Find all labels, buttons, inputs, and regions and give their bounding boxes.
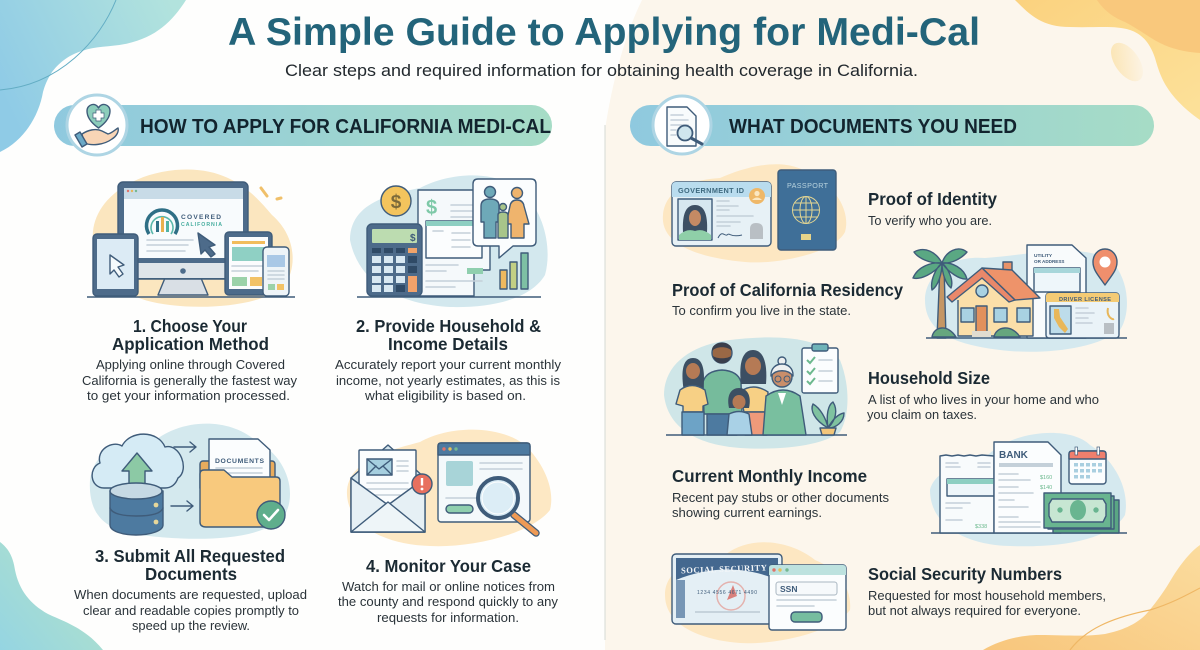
illustration: family with checklist <box>664 337 848 449</box>
step 4 text <box>338 579 558 625</box>
illustration: devices with Covered California site: CALIFORNIA <box>181 222 222 228</box>
illustration: house, palm tree, utility bill and license <box>913 245 1127 352</box>
illustration: envelope and case portal with magnifier <box>347 430 551 546</box>
document: proof of identity <box>663 164 997 262</box>
step 4 text: the county and respond quickly to any <box>338 594 558 609</box>
illustration: pay stub, bank statement, calendar and cash <box>930 433 1127 546</box>
illustration: social security card and SSN form <box>665 542 850 643</box>
text: social security numbers: but not always required for everyone. <box>868 603 1081 618</box>
step 2 text <box>335 357 562 403</box>
illustration: social security card and SSN form: SSN <box>780 584 797 594</box>
step 3 text: speed up the review. <box>132 618 250 633</box>
step 2 heading <box>356 316 541 354</box>
illustration: house, palm tree, utility bill and license: DRIVER LICENSE <box>1059 297 1111 303</box>
illustration: government ID and passport: PASSPORT <box>787 181 829 190</box>
step 1 <box>82 169 297 403</box>
step 1 heading: 1. Choose Your <box>133 316 247 336</box>
panel header: how to apply <box>54 95 552 155</box>
illustration: cloud upload to documents folder: DOCUMENTS <box>215 458 264 465</box>
panel: how to apply <box>54 95 562 633</box>
text: current monthly income <box>672 490 890 520</box>
illustration: cloud upload to documents folder <box>90 424 290 539</box>
illustration: social security card and SSN form: SOCIAL SECURITY <box>681 562 767 575</box>
illustration: devices with Covered California site <box>87 169 295 307</box>
step 2 text: Accurately report your current monthly <box>335 357 562 372</box>
step 3 heading: 3. Submit All Requested <box>95 546 285 566</box>
text: proof of identity: To verify who you are. <box>868 213 992 228</box>
heading: proof of residency: Proof of California Residency <box>672 280 903 300</box>
illustration: pay stub, bank statement, calendar and cash: BANK <box>999 450 1029 461</box>
text: household size: A list of who lives in your home and who <box>868 392 1099 407</box>
step 3 heading <box>95 546 285 584</box>
illustration: devices with Covered California site: COVERED <box>181 214 221 221</box>
subtitle: Clear steps and required information for obtaining health coverage in California. <box>285 61 918 80</box>
step 4 <box>338 430 558 625</box>
step 4 text: Watch for mail or online notices from <box>342 579 555 594</box>
step 1 text: to get your information processed. <box>87 388 290 403</box>
text: proof of residency: To confirm you live in the state. <box>672 303 851 318</box>
step 4 heading: 4. Monitor Your Case <box>366 556 531 576</box>
step 2 text: income, not yearly estimates, as this is <box>336 373 561 388</box>
step 3 <box>74 424 307 633</box>
text: social security numbers: Requested for most household members, <box>868 588 1106 603</box>
illustration: government ID and passport <box>663 164 846 262</box>
step 2 heading: Income Details <box>388 334 508 354</box>
document: current monthly income <box>672 433 1127 546</box>
illustration: pay stub, bank statement, calendar and cash: $140 <box>1040 485 1052 491</box>
illustration: government ID and passport: GOVERNMENT ID <box>678 186 744 195</box>
document: proof of residency <box>672 245 1127 352</box>
step 4 text: requests for information. <box>377 610 519 625</box>
document: household size <box>664 337 1099 449</box>
step 1 text <box>82 357 297 403</box>
step 1 heading: Application Method <box>112 334 269 354</box>
step 2 text: what eligibility is based on. <box>364 388 526 403</box>
illustration: house, palm tree, utility bill and license: UTILITY <box>1034 253 1053 259</box>
illustration: pay stub, bank statement, calendar and cash: $338 <box>975 524 987 530</box>
step 3 text: clear and readable copies promptly to <box>83 603 299 618</box>
illustration: calculator, income form and family <box>350 175 548 307</box>
panel: what documents you need <box>630 96 1154 643</box>
heading: social security numbers: Social Security Numbers <box>868 564 1062 584</box>
step 3 heading: Documents <box>145 564 237 584</box>
step 3 text: When documents are requested, upload <box>74 587 307 602</box>
illustration: pay stub, bank statement, calendar and cash: $160 <box>1040 475 1052 481</box>
illustration: social security card and SSN form: 1234 4556 4671 4490 <box>697 590 757 596</box>
illustration: calculator, income form and family: $ <box>410 233 416 244</box>
illustration: calculator, income form and family: $ <box>426 197 437 219</box>
panel header: documents <box>630 96 1154 154</box>
text: household size <box>867 392 1099 422</box>
illustration: calculator, income form and family: $ <box>391 192 402 213</box>
panel header: documents: WHAT DOCUMENTS YOU NEED <box>729 116 1017 138</box>
heading: current monthly income: Current Monthly Income <box>672 466 867 486</box>
step 3 text <box>74 587 307 633</box>
panel header: how to apply: HOW TO APPLY FOR CALIFORNIA MEDI-CAL <box>140 116 551 138</box>
title: A Simple Guide to Applying for Medi-Cal <box>228 11 980 54</box>
step 1 heading <box>112 316 269 354</box>
step 2 heading: 2. Provide Household & <box>356 316 541 336</box>
text: current monthly income: Recent pay stubs or other documents <box>672 490 890 505</box>
step 1 text: Applying online through Covered <box>96 357 285 372</box>
heading: proof of identity: Proof of Identity <box>868 189 997 209</box>
step 2 <box>335 175 562 403</box>
text: social security numbers <box>868 588 1106 618</box>
heading: household size: Household Size <box>868 368 990 388</box>
text: household size: you claim on taxes. <box>867 407 977 422</box>
step 1 text: California is generally the fastest way <box>82 373 297 388</box>
text: current monthly income: showing current earnings. <box>672 505 822 520</box>
document: social security numbers <box>665 542 1106 643</box>
illustration: house, palm tree, utility bill and license: OR ADDRESS <box>1034 259 1064 264</box>
